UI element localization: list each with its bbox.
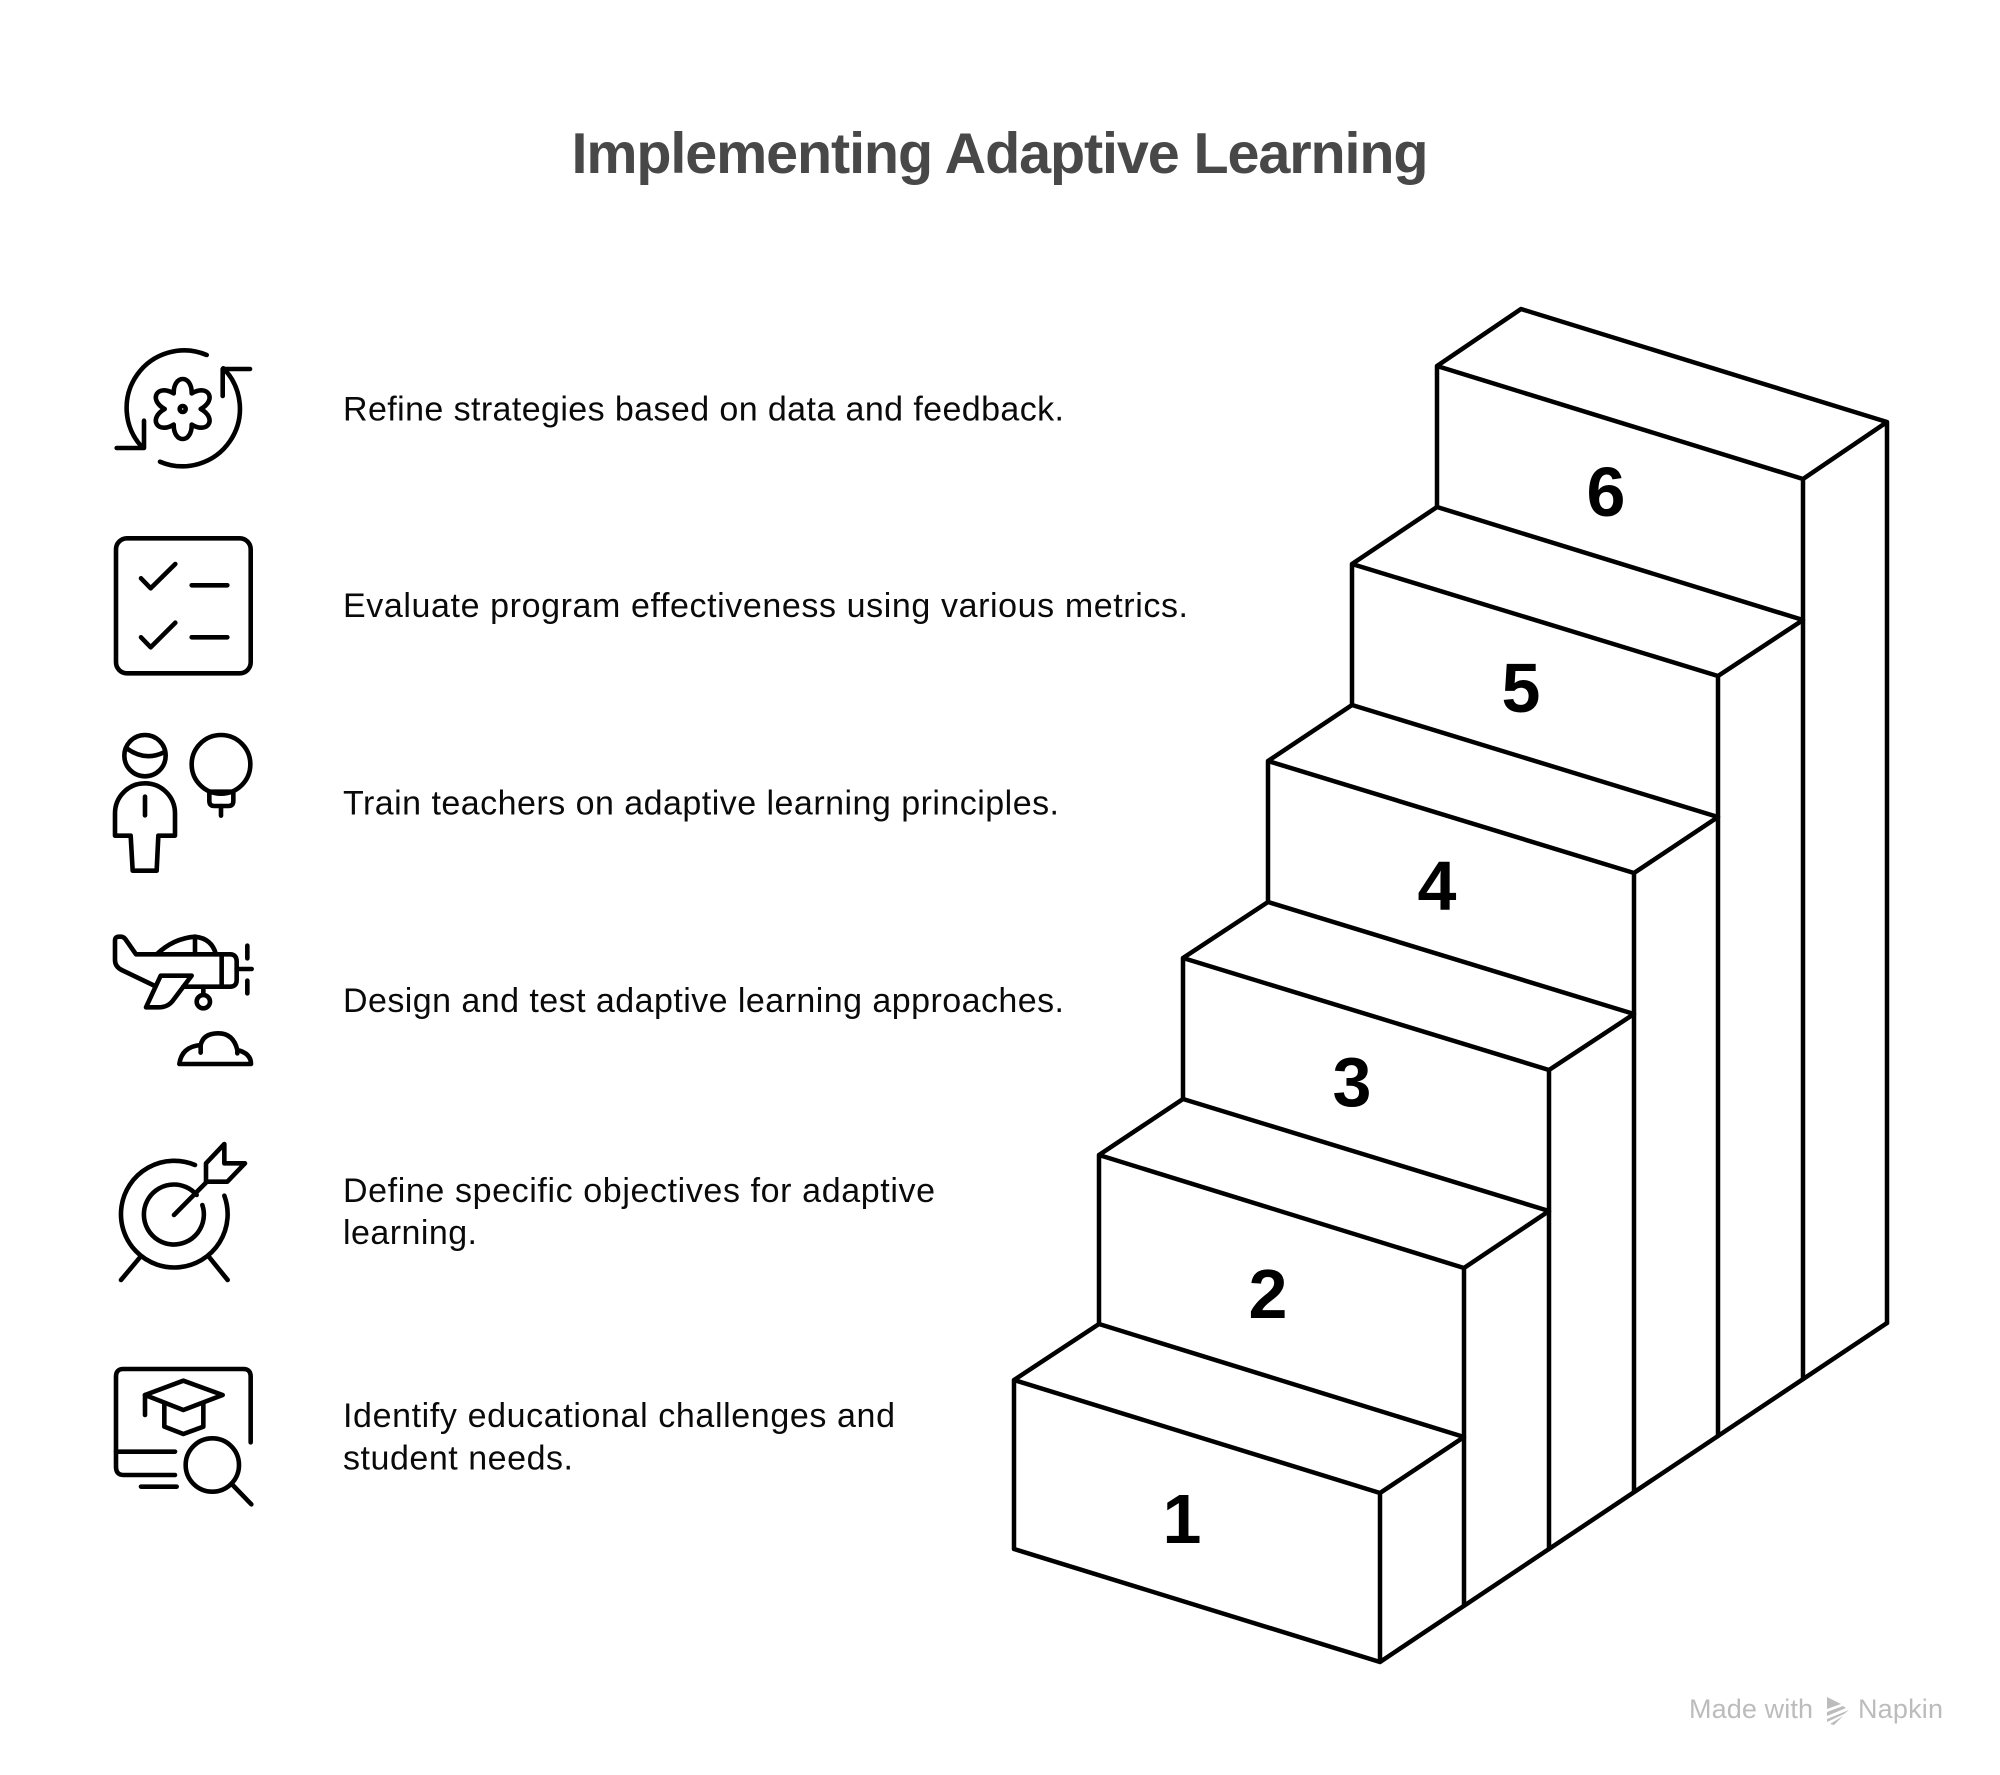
icon: teacher and light bulb — [115, 735, 250, 871]
icon: napkin logo — [1827, 1697, 1849, 1725]
icon: airplane and cloud — [115, 937, 252, 1064]
text: refine: Refine strategies based on data and feedback. — [343, 390, 1064, 428]
number 2: 2 — [1249, 1255, 1287, 1333]
step 1 — [1014, 1323, 1887, 1662]
staircase diagram — [1014, 309, 1887, 1662]
number 3: 3 — [1333, 1043, 1371, 1121]
step 4 — [1268, 705, 1718, 1492]
title: Implementing Adaptive Learning — [572, 122, 1428, 186]
text: identify — [343, 1397, 895, 1478]
number 5: 5 — [1502, 649, 1540, 727]
text: identify: Identify educational challenges and — [343, 1397, 895, 1435]
text: design: Design and test adaptive learning approaches. — [343, 982, 1064, 1020]
step 6 — [1437, 309, 1887, 1379]
step 3 — [1183, 902, 1634, 1549]
icon: graduation cap with magnifier — [116, 1369, 251, 1504]
text: identify: student needs. — [343, 1440, 573, 1478]
watermark: Made with — [1689, 1694, 1813, 1724]
step 2 — [1099, 1099, 1549, 1605]
number 6: 6 — [1587, 453, 1625, 531]
icon: gear with refresh arrows — [117, 350, 250, 466]
text: define: Define specific objectives for adaptive — [343, 1172, 935, 1210]
icon: target with arrow — [121, 1144, 245, 1280]
watermark: Napkin — [1858, 1694, 1943, 1724]
number 4: 4 — [1418, 847, 1457, 925]
text: train: Train teachers on adaptive learning principles. — [343, 784, 1059, 822]
text: define: learning. — [343, 1214, 477, 1252]
watermark — [1689, 1694, 1943, 1725]
text: evaluate: Evaluate program effectiveness using various metrics. — [343, 587, 1188, 625]
text: define — [343, 1172, 935, 1252]
icon: checklist — [116, 538, 251, 673]
step 5 — [1352, 507, 1803, 1436]
number 1: 1 — [1163, 1480, 1201, 1558]
